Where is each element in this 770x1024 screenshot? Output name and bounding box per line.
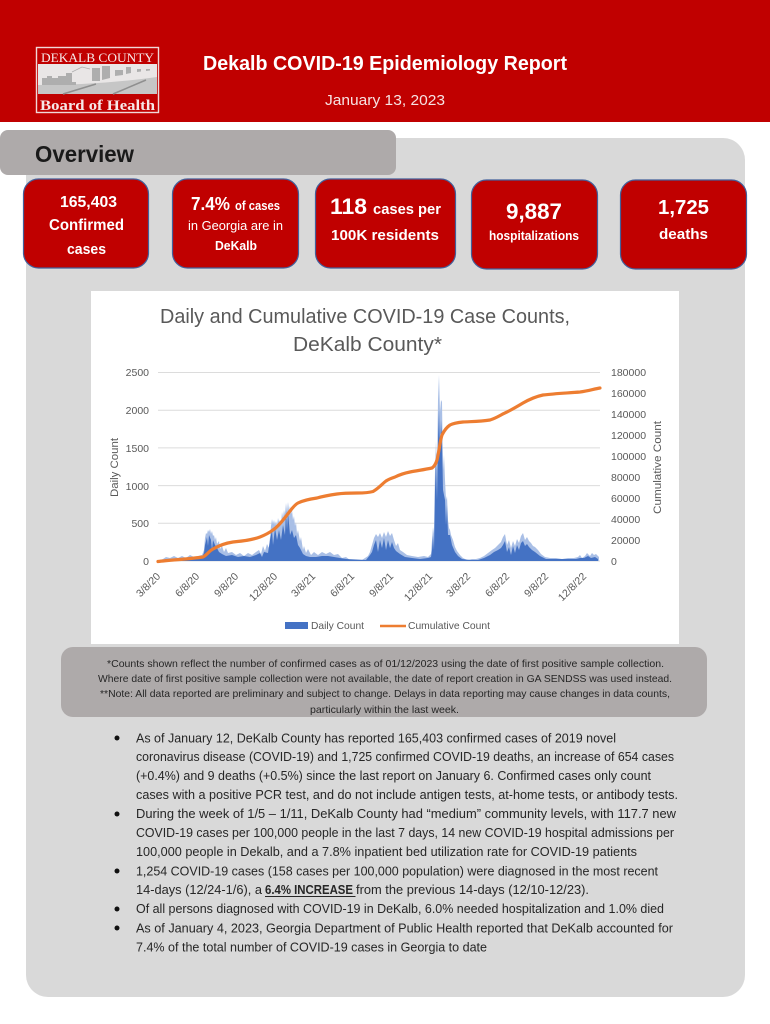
left axis ticks: 1500 — [126, 443, 149, 455]
logo: DeKalb County Board of Health: Board of Health — [40, 98, 156, 114]
overview background panel — [26, 138, 745, 997]
stat card: confirmed cases: 165,403 — [60, 194, 117, 211]
daily count bars — [158, 375, 599, 561]
stat card: confirmed cases — [24, 179, 148, 268]
stat card: confirmed cases: Confirmed — [49, 217, 124, 234]
chart legend: Cumulative Count — [408, 620, 490, 632]
left axis label: Daily Count — [109, 438, 121, 497]
stat card: cases per 100K: cases per — [373, 201, 441, 218]
right axis ticks: 120000 — [611, 430, 646, 442]
right axis ticks: 180000 — [611, 367, 646, 379]
bullet: hospitalization and death rates: Of all persons diagnosed with COVID-19 in DeKalb, 6.0% needed hospitalization and 1.0% died — [136, 901, 664, 916]
footnote box — [61, 647, 707, 717]
bullet: January 12 summary — [136, 730, 678, 802]
stat card: share of Georgia cases: of cases — [235, 199, 280, 213]
overview heading bar — [0, 130, 396, 175]
left axis ticks: 0 — [143, 556, 149, 568]
stat card: cases per 100K: 100K residents — [331, 227, 439, 244]
stat card: deaths — [620, 180, 746, 269]
bullet markers — [114, 736, 120, 930]
stat card: hospitalizations: hospitalizations — [489, 229, 579, 243]
bullet: 14-day increase: 14-days (12/24-1/6), a — [136, 882, 263, 897]
right axis label: Cumulative Count — [652, 421, 664, 514]
bullet: community levels: 100,000 people in Dekalb, and a 7.8% inpatient bed utilization rate for COVID-19 patients — [136, 844, 637, 859]
header band — [0, 0, 770, 122]
stat card: cases per 100K — [316, 179, 456, 268]
cumulative count line — [158, 388, 600, 562]
left axis ticks: 2000 — [126, 405, 149, 417]
date axis labels: 6/8/20 — [173, 571, 202, 600]
report date: January 13, 2023 — [325, 92, 445, 109]
right axis ticks: 100000 — [611, 451, 646, 463]
left axis ticks: 500 — [131, 518, 149, 530]
chart panel — [91, 291, 679, 644]
footnote box: *Counts shown reflect the number of confirmed cases as of 01/12/2023 using the date of first positive sample collection. — [107, 659, 664, 670]
date axis labels: 9/8/22 — [522, 571, 551, 600]
date axis labels: 6/8/22 — [483, 571, 512, 600]
stat card: share of Georgia cases: in Georgia are in — [188, 219, 283, 233]
bullet: 14-day increase: from the previous 14-days (12/10-12/23). — [356, 882, 589, 897]
chart legend: Daily Count — [311, 620, 364, 632]
chart title: Daily and Cumulative COVID-19 Case Counts, — [160, 305, 570, 328]
date axis labels: 9/8/21 — [367, 571, 396, 600]
chart legend — [285, 620, 490, 632]
right axis ticks: 40000 — [611, 514, 640, 526]
stat card: confirmed cases: cases — [67, 241, 106, 258]
bullet: January 12 summary: As of January 12, DeKalb County has reported 165,403 confirmed cases of 2019 novel — [136, 730, 616, 746]
bullet: January 12 summary: cases with a positive PCR test, and do not include antigen tests, at-home tests, or antibody tests. — [136, 787, 678, 802]
logo: DeKalb County Board of Health: DEKALB COUNTY — [41, 51, 154, 65]
stat card: deaths: deaths — [659, 226, 708, 243]
chart title: DeKalb County* — [293, 333, 442, 356]
stat card: share of Georgia cases — [172, 179, 298, 268]
logo: DeKalb County Board of Health — [36, 48, 158, 114]
right axis ticks: 20000 — [611, 535, 640, 547]
footnote box: **Note: All data reported are preliminary and subject to change. Delays in data reporting may cause changes in data counts, — [100, 689, 670, 700]
left axis ticks — [126, 367, 149, 568]
left axis ticks: 2500 — [126, 367, 149, 379]
date axis labels: 9/8/20 — [212, 571, 241, 600]
date axis labels: 3/8/21 — [289, 571, 318, 600]
overview heading bar: Overview — [35, 141, 135, 167]
bullet: January 12 summary: (+0.4%) and 9 deaths (+0.5%) since the last report on January 6. Confirmed cases only count — [136, 768, 651, 783]
date axis labels: 3/8/20 — [134, 571, 163, 600]
right axis ticks — [611, 367, 646, 568]
right axis ticks: 60000 — [611, 493, 640, 505]
bullet list — [114, 730, 678, 954]
bullet: community levels: COVID-19 cases per 100,000 people in the last 7 days, 14 new COVID-19 hospital admissions per — [136, 825, 675, 840]
date axis labels: 3/8/22 — [444, 571, 473, 600]
bullet: share of Georgia total — [136, 920, 674, 954]
bullet: share of Georgia total: As of January 4, 2023, Georgia Department of Public Health reported that DeKalb accounted for — [136, 920, 674, 936]
bullet: 14-day increase: 6.4% INCREASE — [265, 882, 353, 897]
right axis ticks: 140000 — [611, 409, 646, 421]
date axis labels: 12/8/22 — [556, 571, 589, 604]
bullet: share of Georgia total: 7.4% of the total number of COVID-19 cases in Georgia to date — [136, 940, 487, 954]
date axis labels: 12/8/20 — [247, 571, 280, 604]
right axis ticks: 0 — [611, 556, 617, 568]
stat card: share of Georgia cases: DeKalb — [215, 239, 257, 253]
date axis labels: 12/8/21 — [402, 571, 435, 604]
date axis labels: 6/8/21 — [328, 571, 357, 600]
chart title — [160, 305, 570, 356]
bullet: 14-day increase — [136, 864, 658, 897]
left axis ticks: 1000 — [126, 481, 149, 493]
bullet: 14-day increase: 1,254 COVID-19 cases (158 cases per 100,000 population) were diagnosed in the most recent — [136, 864, 658, 878]
stat card: cases per 100K: 118 — [330, 194, 367, 219]
report title: Dekalb COVID-19 Epidemiology Report — [203, 52, 567, 75]
right axis ticks: 160000 — [611, 388, 646, 400]
bullet: community levels: During the week of 1/5 – 1/11, DeKalb County had “medium” community levels, with 117.7 new — [136, 806, 676, 821]
footnote box: particularly within the last week. — [310, 705, 459, 716]
bullet: January 12 summary: coronavirus disease (COVID-19) and 1,725 confirmed COVID-19 deaths, an increase of 654 cases — [136, 749, 674, 764]
right axis ticks: 80000 — [611, 472, 640, 484]
stat card: deaths: 1,725 — [658, 197, 709, 219]
stat card: hospitalizations: 9,887 — [506, 199, 562, 224]
footnote box: Where date of first positive sample collection were not available, the date of report creation in GA SENDSS was used instead. — [98, 674, 672, 685]
bullet: community levels — [136, 806, 676, 859]
stat card: share of Georgia cases: 7.4% — [191, 194, 230, 214]
stat card: hospitalizations — [472, 180, 598, 269]
date axis labels — [134, 571, 589, 604]
